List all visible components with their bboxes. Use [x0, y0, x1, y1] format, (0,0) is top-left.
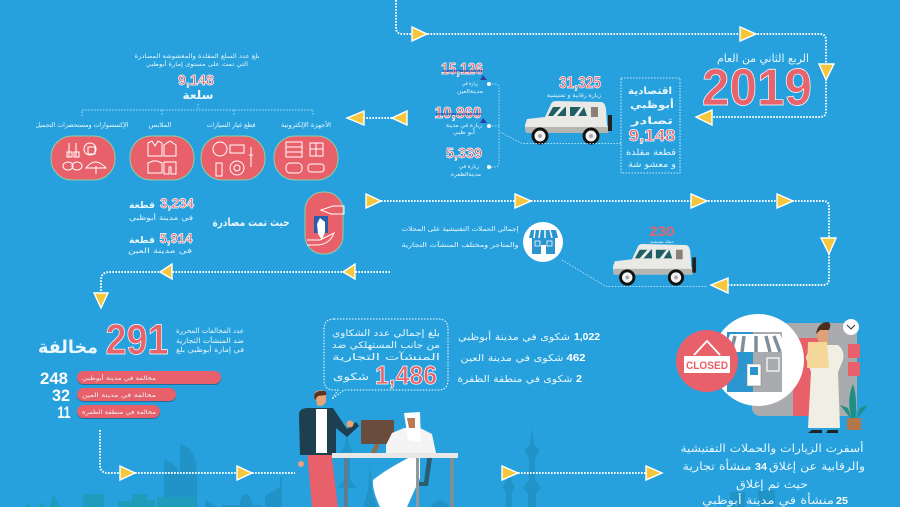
intro text: seized goods total	[134, 53, 260, 102]
list: complaints by area: شكوى في منطقة الظفرة	[458, 374, 573, 385]
stat: visits in Al Ain: 15,126	[441, 61, 483, 78]
text: seized by: حيث تمت مصادرة	[212, 216, 290, 229]
icon: confiscation pill	[305, 192, 344, 254]
stat: total violations	[38, 316, 244, 364]
speech bubble: total complaints: 1,486	[375, 360, 437, 390]
stat: seized in Al Ain: 5,914	[160, 230, 193, 246]
stat: seized in Abu Dhabi: في مدينة أبوظبي	[129, 213, 193, 222]
route: top path with arrows	[396, 0, 834, 125]
stat: visits in Abu Dhabi: زيارة في مدينة	[446, 123, 482, 129]
stat: visits in Abu Dhabi: 10,860	[434, 105, 482, 122]
text: closures summary	[680, 441, 865, 507]
box: counterfeit goods summary: تصادر	[630, 116, 673, 127]
plant	[840, 384, 868, 430]
speech bubble: total complaints: شكوى	[333, 372, 369, 383]
text: inspection campaigns: إجمالي الحملات التفتيشية على المحلات	[402, 225, 519, 233]
category: accessories and cosmetics: الإكسسوارات ومستحضرات التجميل	[36, 121, 129, 129]
car: inspection campaigns	[562, 223, 707, 286]
car: inspection visits: زيارة رقابية و تفتيشية	[547, 93, 601, 99]
stat: visits in Al Dhafra: 5,339	[446, 145, 482, 162]
stat: total violations: في إمارة أبوظبي بلغ	[176, 345, 244, 354]
stat: total violations: مخالفة	[38, 337, 98, 358]
box: counterfeit goods summary	[621, 78, 680, 173]
text: closures summary: منشأة في مدينة أبوظبي	[702, 492, 834, 507]
closed sign	[676, 330, 738, 392]
skyline: mosque silhouette	[337, 428, 775, 507]
text: closures summary: 25	[836, 495, 848, 507]
clock	[843, 319, 859, 335]
list: complaints by area: 462	[566, 353, 586, 364]
illustration: office scene	[298, 390, 458, 507]
category: electronics	[274, 120, 338, 180]
bar: violations in Al Dhafra: 11	[58, 403, 70, 422]
box: counterfeit goods summary: و معشو شة	[628, 160, 676, 170]
stat: total violations: ضد المنشآت التجارية	[176, 336, 244, 345]
seated man	[373, 412, 436, 507]
speech bubble: total complaints: من جانب المستهلكي ضد	[332, 341, 440, 351]
speech bubble: total complaints: المنشآت التجارية	[332, 351, 440, 363]
stat: visits in Abu Dhabi	[434, 105, 487, 136]
box: counterfeit goods summary: اقتصادية	[628, 86, 672, 97]
desk	[332, 453, 458, 507]
intro text: seized goods total: بلغ عدد السلع المقلدة والمغشوشة المصادرة	[134, 53, 260, 60]
bar: violations in Al Dhafra	[58, 403, 160, 422]
text: inspection campaigns: والمتاجر ومختلف المنشآت التجارية	[402, 240, 518, 249]
text: closures summary: 34	[755, 461, 767, 473]
text: closures summary: والرقابية عن إغلاق	[769, 460, 865, 473]
list: complaints by area	[458, 330, 600, 385]
bar: violations in Abu Dhabi: مخالفة في مدينة أبوظبي	[82, 374, 156, 382]
icon: shop in white circle	[523, 222, 563, 262]
stat: total violations: عدد المخالفات المحررة	[176, 327, 244, 335]
speech bubble: total complaints: بلغ إجمالي عدد الشكاوي	[332, 329, 440, 339]
white shop circle	[712, 314, 804, 406]
text: closures summary: حيث تم إغلاق	[736, 478, 808, 491]
car: inspection visits: 31,325	[559, 73, 601, 92]
car: inspection campaigns: 230	[650, 223, 675, 239]
route: left return path with arrows	[94, 264, 390, 308]
car: inspection campaigns: حملة تفتيشية	[650, 239, 675, 244]
bar: violations in Al Ain	[52, 386, 176, 405]
stat: seized in Abu Dhabi: قطعة	[129, 201, 155, 211]
bar: violations in Al Dhafra: مخالفة في منطقة الظفرة	[82, 410, 156, 416]
bar: violations in Abu Dhabi: 248	[40, 369, 68, 388]
car: inspection visits	[525, 73, 612, 144]
stat: visits in Al Ain: زيارة في	[462, 81, 478, 87]
intro text: seized goods total: التي تمت على مستوى إمارة أبوظبي	[146, 60, 248, 68]
text: inspection campaigns	[402, 225, 519, 249]
stat: seized in Abu Dhabi: 3,234	[160, 195, 194, 211]
route: middle path with arrows	[366, 194, 836, 293]
stat: total violations: 291	[106, 316, 168, 364]
stat: visits in Abu Dhabi: أبو ظبي	[453, 128, 476, 136]
stat: visits in Al Ain: مدينةالعين	[457, 89, 483, 95]
list: complaints by area: 2	[576, 374, 582, 385]
arrows: left pointing pair	[347, 111, 407, 125]
intro text: seized goods total: 9,148	[178, 72, 214, 89]
category: auto parts	[201, 121, 265, 180]
box: counterfeit goods summary: أبوظبي	[630, 98, 674, 111]
speech bubble: total complaints	[324, 319, 448, 399]
illustration: closed shop	[676, 314, 868, 433]
stat: visits in Al Dhafra: مدينةالظفرة	[451, 172, 481, 178]
heading: quarter and year: الربع الثاني من العام	[717, 52, 809, 65]
category: clothing	[130, 121, 194, 180]
stat: seized in Al Ain	[128, 230, 193, 255]
stat: seized in Abu Dhabi	[129, 195, 194, 222]
stat: visits in Al Dhafra	[446, 145, 482, 178]
bar: violations in Al Ain: 32	[52, 386, 70, 405]
stat: visits in Al Dhafra: زيارة في	[459, 164, 479, 170]
text: closures summary: منشأة تجارية	[682, 458, 752, 473]
list: complaints by area: شكوى في مدينة أبوظبي	[458, 330, 570, 343]
intro text: seized goods total: سلعة	[182, 88, 214, 102]
man holding papers	[806, 322, 843, 433]
monitor	[361, 420, 394, 453]
route: bottom path with arrows	[100, 430, 662, 480]
category: electronics: الأجهزة الإلكترونية	[281, 120, 331, 129]
category bracket	[82, 104, 313, 116]
list: complaints by area: 1,022	[574, 332, 600, 343]
connector tree: car to visit counts	[487, 82, 621, 169]
stat: seized in Al Ain: في مدينة العين	[128, 247, 192, 255]
category: auto parts: قطع غيار السيارات	[206, 121, 256, 129]
heading: quarter and year: 2019	[702, 59, 812, 117]
box: counterfeit goods summary: 9,148	[628, 126, 676, 145]
box: counterfeit goods summary: قطعة مقلدة	[626, 148, 676, 158]
text: closures summary: أسفرت الزيارات والحملات التفتيشية	[680, 441, 864, 455]
category: clothing: الملابس	[148, 121, 172, 129]
bar: violations in Abu Dhabi	[40, 369, 221, 388]
standing man	[298, 390, 359, 507]
illustration: closed shop: CLOSED	[686, 360, 728, 372]
category: accessories and cosmetics	[36, 121, 129, 180]
list: complaints by area: شكوى في مدينة العين	[460, 353, 564, 364]
skyline: left city silhouette	[25, 444, 282, 507]
bar: violations in Al Ain: مخالفة في مدينة العين	[82, 393, 156, 399]
stat: visits in Al Ain	[441, 61, 487, 95]
stat: seized in Al Ain: قطعة	[129, 236, 155, 246]
